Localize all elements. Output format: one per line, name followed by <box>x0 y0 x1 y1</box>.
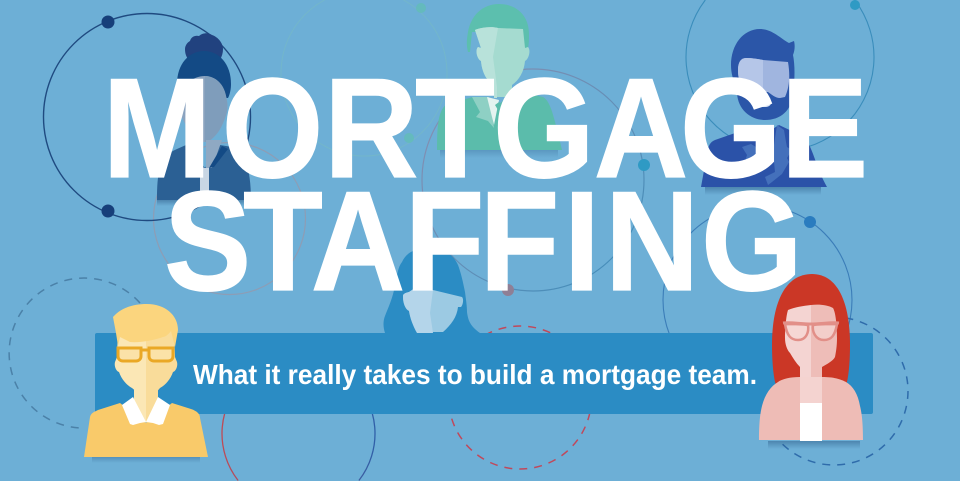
person: red-haired woman with glasses <box>759 274 863 449</box>
glasses <box>783 323 839 340</box>
title: STAFFING <box>164 161 803 320</box>
person: bearded man <box>701 29 827 195</box>
shadow <box>705 187 821 195</box>
person: woman with long hair <box>384 250 480 333</box>
shadow <box>768 441 860 449</box>
person: man in green suit <box>437 4 562 158</box>
subtitle: What it really takes to build a mortgage team. <box>193 359 757 390</box>
shadow <box>157 200 251 206</box>
subtitle banner <box>95 333 873 414</box>
person: woman with bun <box>157 33 251 206</box>
shadow <box>92 457 200 463</box>
title: MORTGAGE <box>103 48 868 207</box>
shadow <box>440 150 558 158</box>
glasses <box>118 348 173 361</box>
title <box>103 48 868 320</box>
person: blond man with glasses <box>84 304 208 463</box>
